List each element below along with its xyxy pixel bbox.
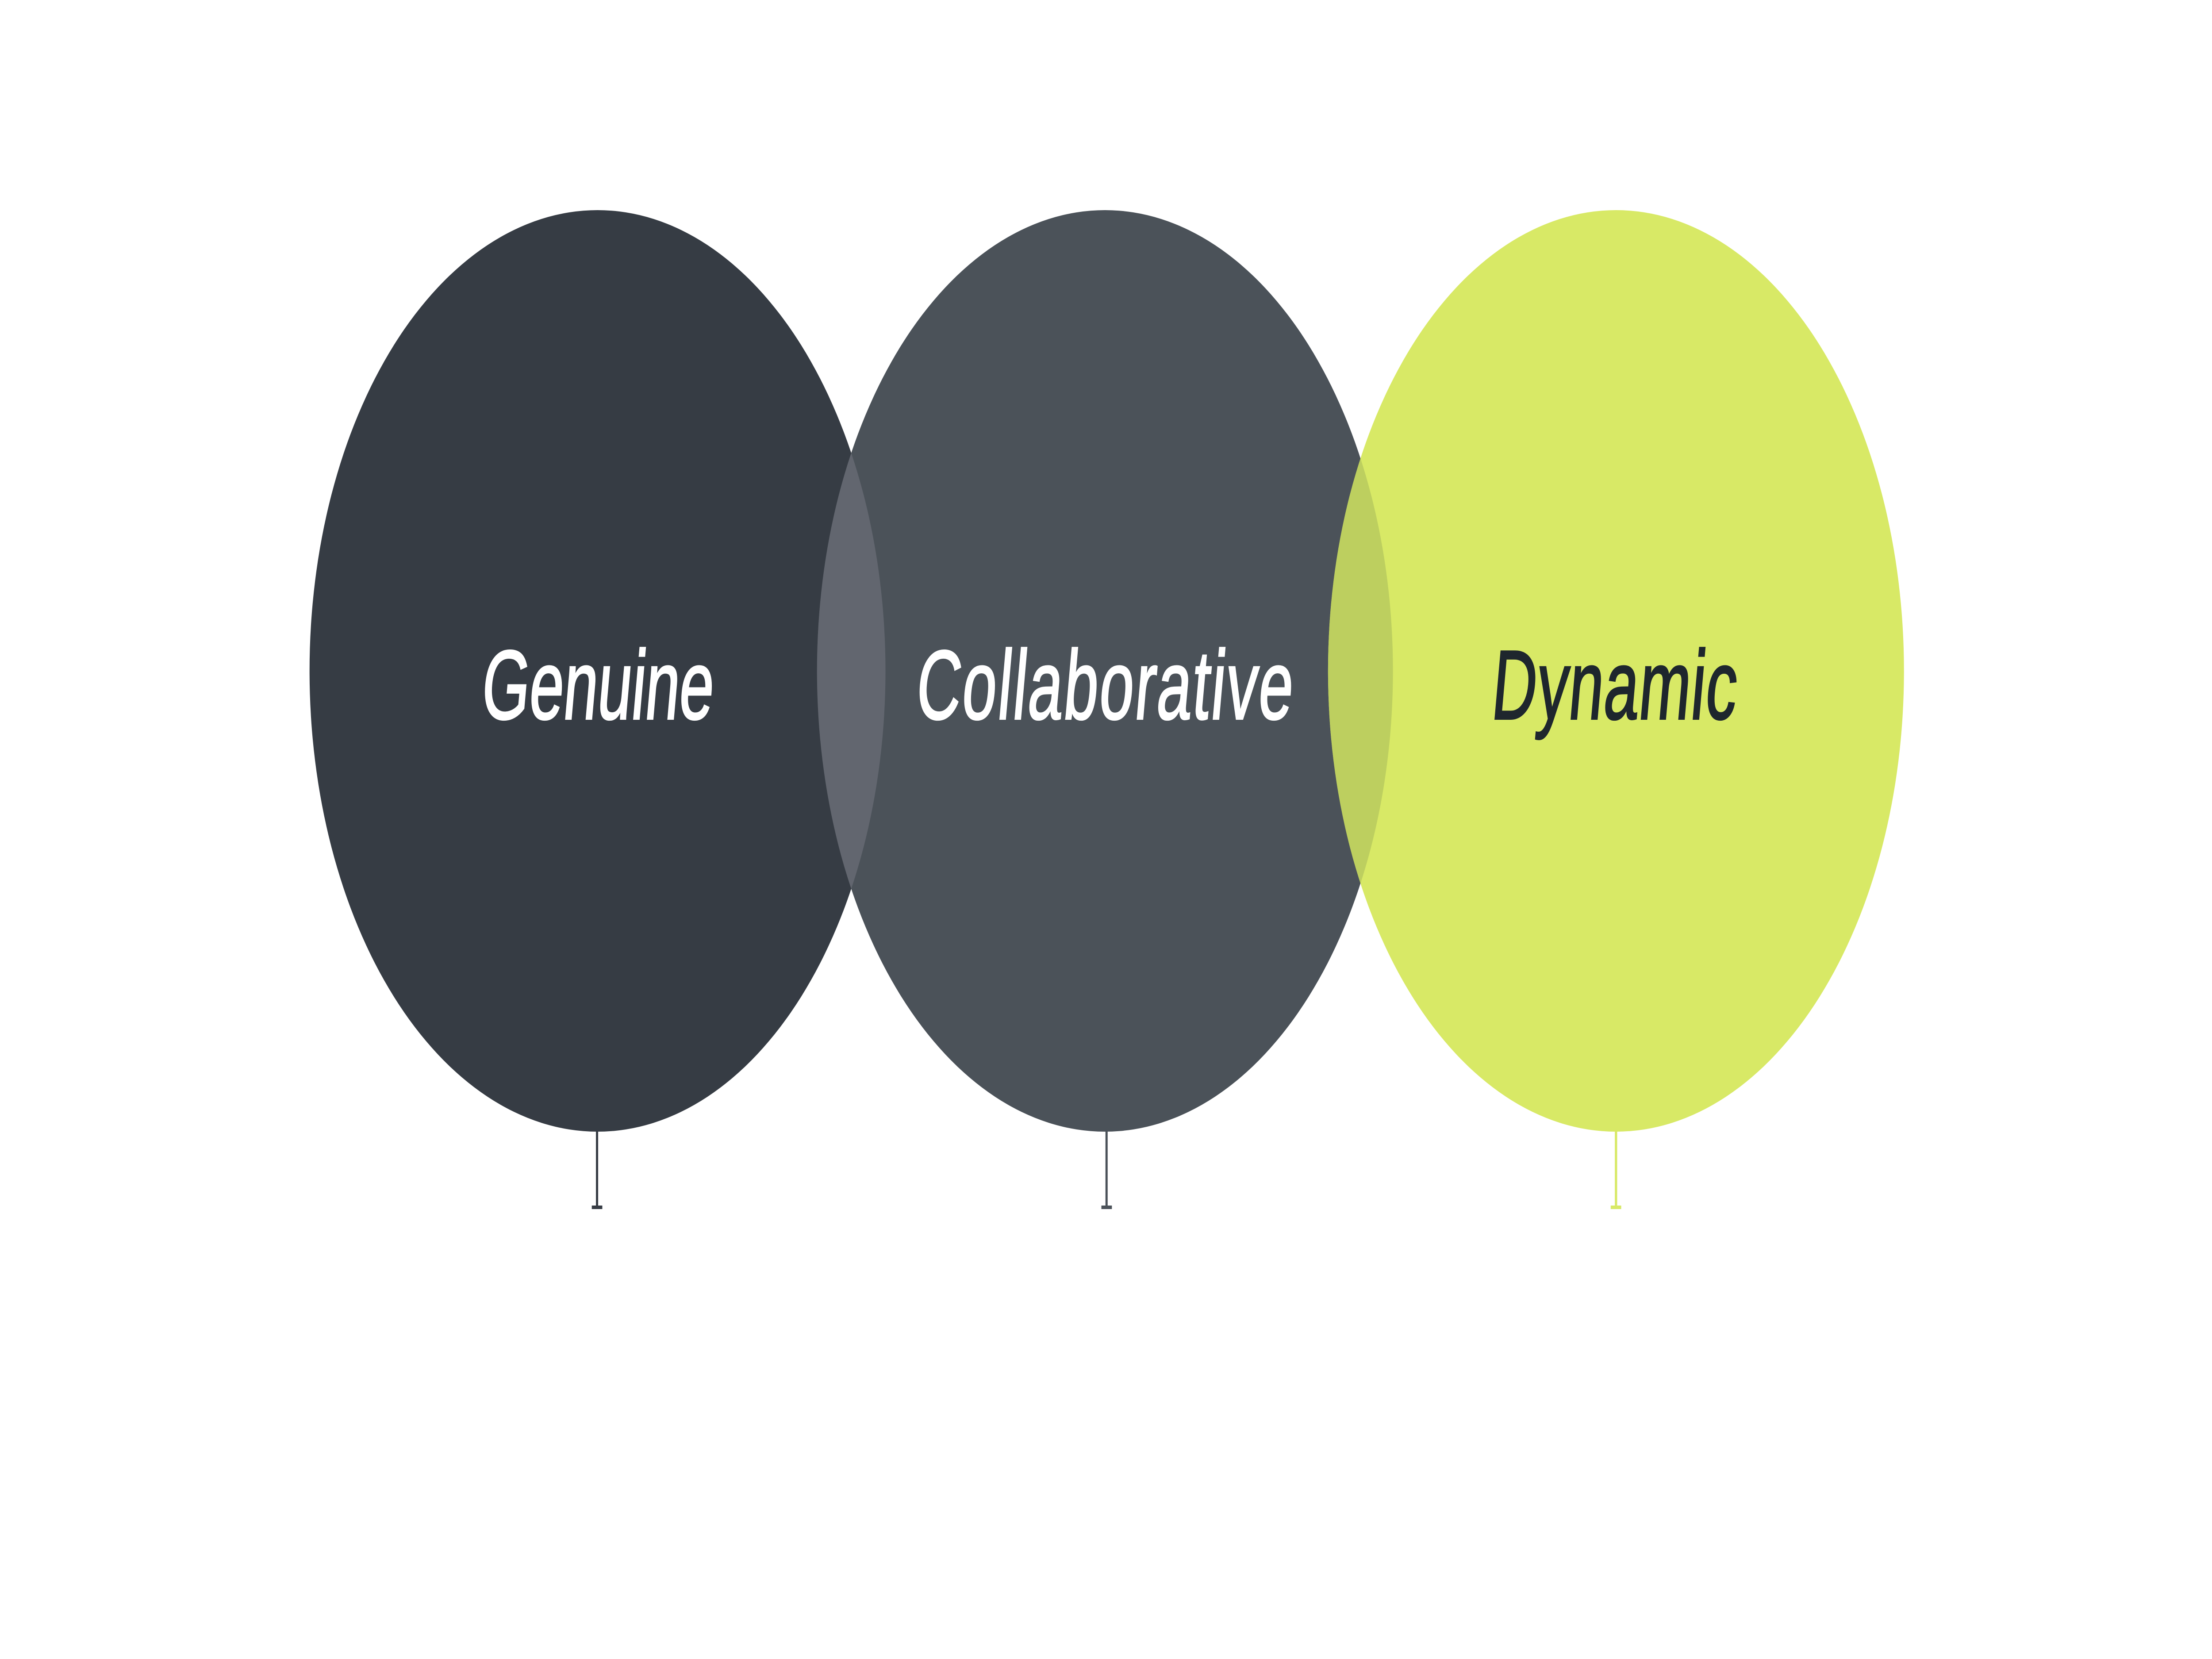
stem: Collaborative <box>1102 1128 1112 1209</box>
stem: Dynamic <box>1611 1128 1621 1209</box>
overlap: Genuine and Collaborative <box>817 453 886 888</box>
circle: Genuine <box>310 210 886 1209</box>
circle: Collaborative <box>817 210 1393 1209</box>
overlap: Collaborative and Dynamic <box>1328 458 1393 883</box>
stem: Genuine <box>592 1128 602 1209</box>
label: Collaborative: Collaborative <box>913 630 1298 740</box>
circle: Dynamic <box>1328 210 1904 1209</box>
label: Dynamic: Dynamic <box>1488 630 1742 740</box>
venn diagram <box>310 210 1904 1209</box>
label: Genuine: Genuine <box>478 630 719 740</box>
